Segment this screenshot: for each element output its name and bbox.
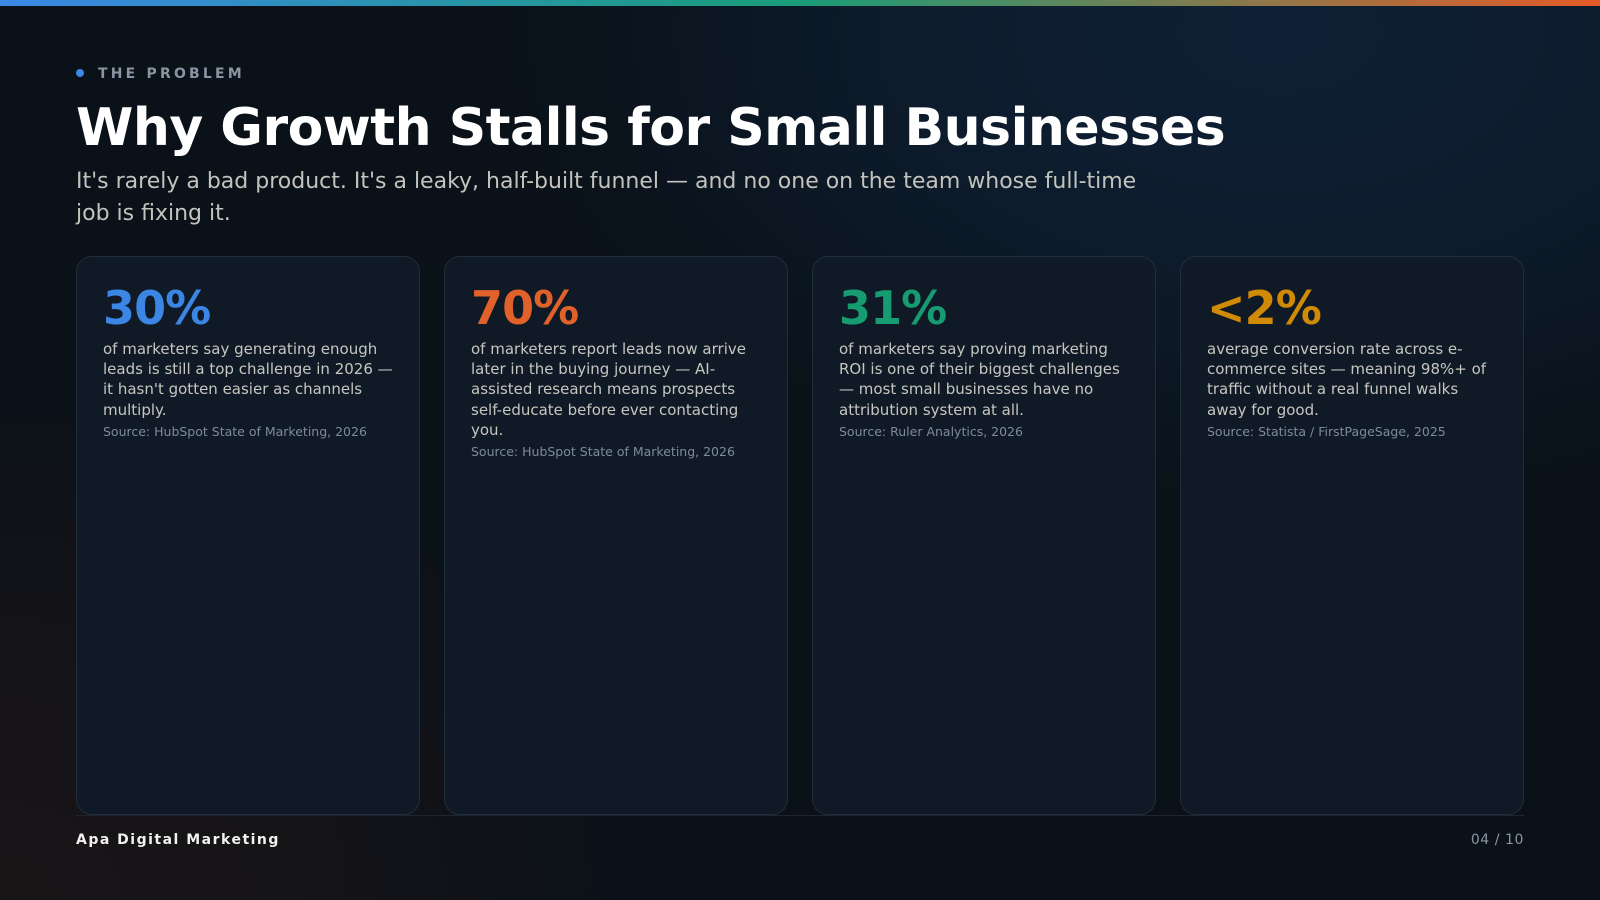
panel: 30% stat card (76, 256, 420, 815)
subtitle: It's rarely a bad product. It's a leaky, half-built funnel — and no one on the team whose full-time job is fixing it. (76, 169, 1136, 226)
text: 30% description and source: of marketers say generating enough leads is still a top challenge in 2026 — it hasn't gotten easier as channels multiply. (103, 340, 393, 418)
page number: 04 / 10 (1471, 832, 1524, 848)
stat: 31%: 31% (839, 281, 946, 335)
text: 31% description and source: of marketers say proving marketing ROI is one of their biggest challenges — most small businesses have no attribution system at all. (839, 340, 1120, 418)
top gradient bar (0, 0, 1600, 6)
footer brand: Apa Digital Marketing (76, 832, 280, 848)
title: Why Growth Stalls for Small Businesses (76, 98, 1225, 158)
panel: under 2% stat card (1180, 256, 1524, 815)
eyebrow label: THE PROBLEM (98, 66, 245, 82)
stat: under 2%: <2% (1207, 281, 1321, 335)
stat: 70%: 70% (471, 281, 578, 335)
text: 70% description and source: of marketers report leads now arrive later in the buying journey — AI-assisted research means prospects self-educate before ever contacting you. (471, 340, 746, 439)
text: under 2% description and source: average conversion rate across e-commerce sites — meaning 98%+ of traffic without a real funnel walks away for good. (1207, 340, 1486, 418)
panel: 31% stat card (812, 256, 1156, 815)
text: 31% description and source: Source: Ruler Analytics, 2026 (839, 424, 1023, 439)
stat: 30%: 30% (103, 281, 210, 335)
text: 70% description and source: Source: HubSpot State of Marketing, 2026 (471, 444, 735, 459)
panel: 70% stat card (444, 256, 788, 815)
text: under 2% description and source: Source: Statista / FirstPageSage, 2025 (1207, 424, 1446, 439)
text: 30% description and source: Source: HubSpot State of Marketing, 2026 (103, 424, 367, 439)
